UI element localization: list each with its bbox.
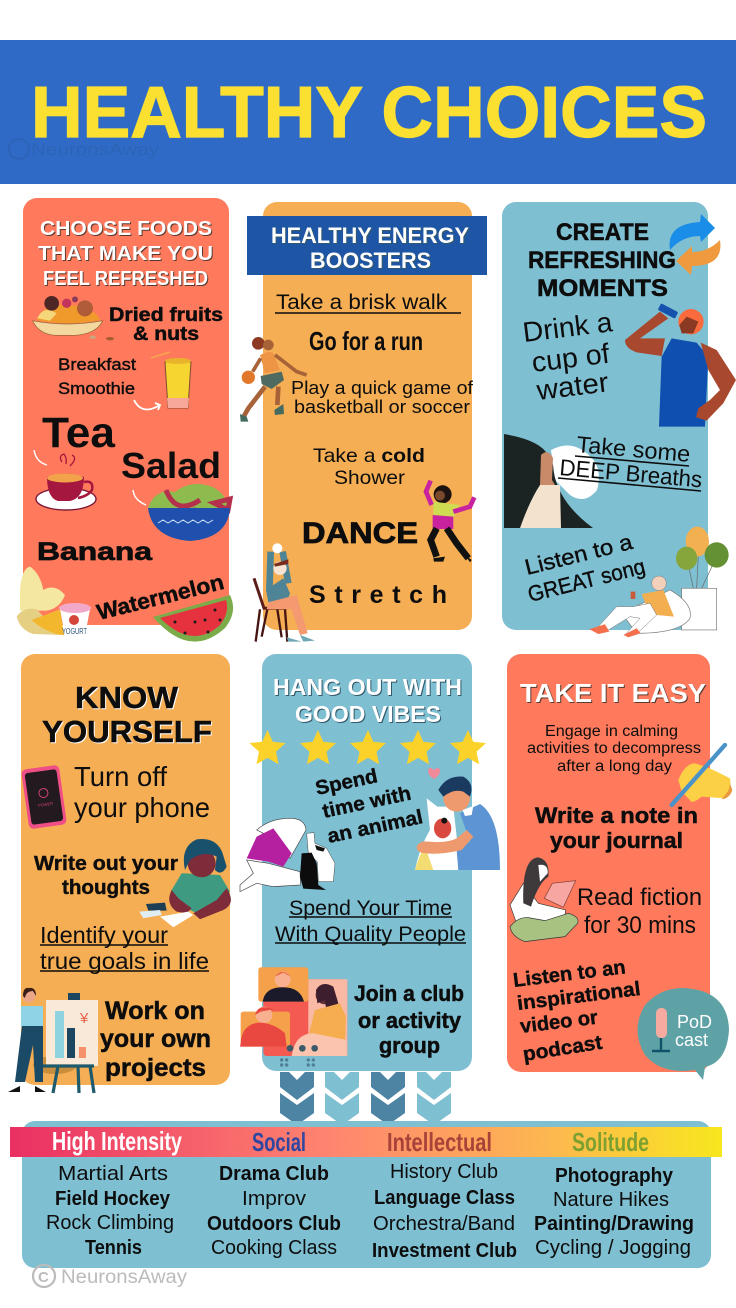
refreshing heading: CREATE (556, 219, 649, 246)
icon: man listening on beanbag (589, 576, 690, 637)
text: drink water: Drink a (521, 306, 614, 348)
header banner (0, 40, 736, 184)
text: run: Go for a run (309, 326, 423, 356)
icon: girl reading (510, 857, 578, 942)
panel: good vibes (240, 654, 500, 1071)
icon: watermelon (153, 595, 233, 642)
foods text (58, 305, 223, 398)
text: dance: DANCE (302, 517, 418, 550)
icon: woman breathing (504, 434, 599, 528)
text: projects: projects (105, 1054, 206, 1082)
text: drink water: cup of (530, 338, 611, 378)
icon: woman with chart: ¥ (79, 1010, 89, 1027)
text: inspirational: podcast (521, 1032, 604, 1066)
column: solitude (534, 1165, 694, 1259)
text: drink water (521, 306, 614, 406)
text: goals: true goals in life (40, 948, 209, 974)
text: deep breaths: Take some (576, 431, 691, 467)
know yourself heading: KNOW (75, 680, 179, 715)
text: projects (100, 997, 211, 1082)
text: journal: Write a note in (535, 803, 698, 828)
text: play: basketball or soccer (294, 396, 470, 417)
panel: energy boosters (240, 202, 487, 642)
know yourself heading: YOURSELF (42, 714, 212, 749)
icon: phone (21, 765, 67, 829)
icon: woman with cats (240, 818, 335, 892)
text: read fiction: for 30 mins (584, 912, 696, 939)
text: banana: Banana (37, 538, 153, 566)
text: goals: Identify your (40, 922, 168, 948)
icon: salad bowl (133, 484, 230, 541)
arrow to smoothie (134, 400, 160, 410)
panel: foods (17, 198, 233, 642)
know yourself heading (42, 680, 212, 749)
column: high intensity: Martial Arts (58, 1163, 168, 1185)
text: club (354, 981, 464, 1058)
text: deep breaths: DEEP Breaths (559, 454, 703, 492)
foods heading (38, 218, 213, 290)
foods text: Breakfast (58, 355, 136, 374)
energy heading: BOOSTERS (310, 248, 431, 273)
refreshing heading: MOMENTS (537, 275, 668, 302)
icon: hand with pen (672, 745, 732, 805)
column: solitude: Cycling / Jogging (535, 1237, 691, 1259)
text: calming: activities to decompress (527, 740, 701, 757)
icon: group video call (240, 967, 347, 1067)
text: quality people (275, 897, 466, 946)
text: animal: an animal (325, 806, 425, 848)
arrows: chevrons (280, 1072, 451, 1125)
column: social: Improv (242, 1188, 306, 1210)
category header band: Intellectual (387, 1127, 492, 1157)
panel: activity table (10, 1121, 722, 1268)
text: brisk walk: Take a brisk walk (276, 291, 448, 314)
text: calming: after a long day (557, 758, 672, 775)
column: solitude: Nature Hikes (553, 1189, 669, 1211)
text: watermelon: Watermelon (94, 569, 226, 625)
panel: refreshing moments (502, 202, 736, 637)
column: solitude: Photography (555, 1165, 674, 1187)
text: play: Play a quick game of (291, 377, 474, 398)
text: great song (522, 529, 648, 607)
column: social: Cooking Class (211, 1237, 337, 1259)
text: salad: Salad (121, 445, 221, 486)
icon: banana (17, 567, 65, 635)
icon: tea cup (34, 450, 96, 510)
refreshing heading (528, 219, 676, 302)
icon: podcast bubble (638, 988, 729, 1080)
header watermark (9, 139, 160, 159)
text: goals (40, 922, 209, 974)
foods heading: FEEL REFRESHED (43, 268, 208, 290)
text: thoughts (34, 853, 178, 899)
icon: five stars (250, 730, 486, 764)
text: phone (74, 761, 210, 823)
column: intellectual: History Club (390, 1161, 498, 1183)
text: animal (313, 765, 425, 848)
foods text: Smoothie (58, 379, 135, 398)
text: drink water: water (534, 366, 610, 406)
energy heading (247, 216, 487, 275)
column: high intensity: Tennis (85, 1237, 142, 1259)
icon: man drinking water (625, 303, 736, 427)
header watermark: NeuronsAway (31, 140, 160, 159)
text: journal (535, 803, 698, 853)
easy heading: TAKE IT EASY (520, 678, 706, 708)
title: HEALTHY CHOICES (31, 73, 707, 153)
column: social: Outdoors Club (207, 1213, 341, 1235)
foods text: & nuts (133, 324, 199, 345)
text: calming (527, 723, 701, 775)
good vibes heading: GOOD VIBES (295, 701, 441, 727)
text: thoughts: thoughts (62, 877, 150, 899)
column: social (207, 1163, 341, 1259)
text: phone: your phone (74, 792, 210, 823)
column: intellectual (372, 1161, 517, 1262)
text: tea: Tea (42, 409, 116, 457)
icon: woman writing (139, 839, 231, 927)
refreshing heading: REFRESHING (528, 247, 676, 274)
category header band: Social (252, 1127, 306, 1157)
foods heading: THAT MAKE YOU (38, 243, 213, 265)
text: projects: Work on (105, 997, 205, 1025)
icon: woman with chart (8, 988, 98, 1093)
text: thoughts: Write out your (34, 853, 178, 875)
text: inspirational (512, 956, 642, 1066)
good vibes heading: HANG OUT WITH (273, 674, 462, 700)
text: journal: your journal (550, 828, 683, 853)
text: read fiction (577, 884, 702, 939)
category header band (10, 1126, 722, 1157)
icon: dancer (426, 481, 474, 562)
foods heading: CHOOSE FOODS (40, 218, 212, 240)
icon: basketball player (240, 337, 307, 422)
icon: plant and pot (676, 527, 729, 630)
text: play (291, 377, 474, 417)
icon: refresh arrows (670, 214, 720, 275)
panel: know yourself (8, 654, 231, 1093)
icon: man hugging dog (415, 776, 500, 870)
foods text: Dried fruits (109, 305, 223, 326)
text: inspirational: video or (519, 1007, 599, 1038)
text: inspirational: Listen to an (512, 956, 627, 992)
watermark: C (38, 1269, 49, 1286)
text: deep breaths (558, 431, 703, 492)
text: projects: your own (100, 1025, 211, 1053)
icon: podcast bubble: PoD (677, 1012, 712, 1032)
text: animal: Spend (313, 765, 380, 800)
energy heading: HEALTHY ENERGY (271, 223, 469, 248)
column: high intensity (46, 1163, 174, 1259)
text: quality people: Spend Your Time (289, 897, 452, 920)
column: high intensity: Field Hockey (55, 1188, 171, 1210)
icon: yogurt: YOGURT (62, 627, 87, 636)
text: shower (313, 445, 425, 489)
icon: person stretching on chair (254, 543, 315, 642)
category header band: Solitude (572, 1127, 649, 1157)
icon: bowl of dried fruit (33, 296, 114, 340)
panel: take it easy (507, 654, 732, 1080)
category header band: High Intensity (52, 1126, 182, 1156)
column: high intensity: Rock Climbing (46, 1212, 174, 1234)
watermark: NeuronsAway (61, 1267, 188, 1288)
text: animal: time with (320, 783, 413, 823)
icon: smoothie glass (151, 352, 191, 408)
text: great song: GREAT song (525, 554, 648, 607)
icon: podcast bubble: cast (675, 1030, 708, 1050)
text: club: Join a club (354, 981, 464, 1006)
watermark (33, 1265, 188, 1288)
text: calming: Engage in calming (545, 723, 678, 740)
text: phone: Turn off (74, 761, 167, 792)
text: read fiction: Read fiction (577, 884, 702, 911)
column: solitude: Painting/Drawing (534, 1213, 694, 1235)
text: quality people: With Quality People (275, 923, 466, 946)
column: intellectual: Investment Club (372, 1240, 517, 1262)
text: club: or activity (358, 1008, 462, 1033)
text: shower: Take a cold (313, 445, 425, 467)
text: inspirational: inspirational (516, 978, 642, 1015)
text: shower: Shower (334, 467, 406, 489)
icon: phone: POWER (38, 801, 54, 808)
column: social: Drama Club (219, 1163, 329, 1185)
text: club: group (379, 1033, 440, 1058)
column: intellectual: Language Class (374, 1187, 515, 1209)
text: great song: Listen to a (522, 529, 636, 580)
column: intellectual: Orchestra/Band (373, 1213, 515, 1235)
good vibes heading (273, 674, 462, 727)
text: stretch: Stretch (309, 581, 447, 609)
icon: heart (428, 768, 440, 779)
icon: yogurt (59, 603, 91, 636)
